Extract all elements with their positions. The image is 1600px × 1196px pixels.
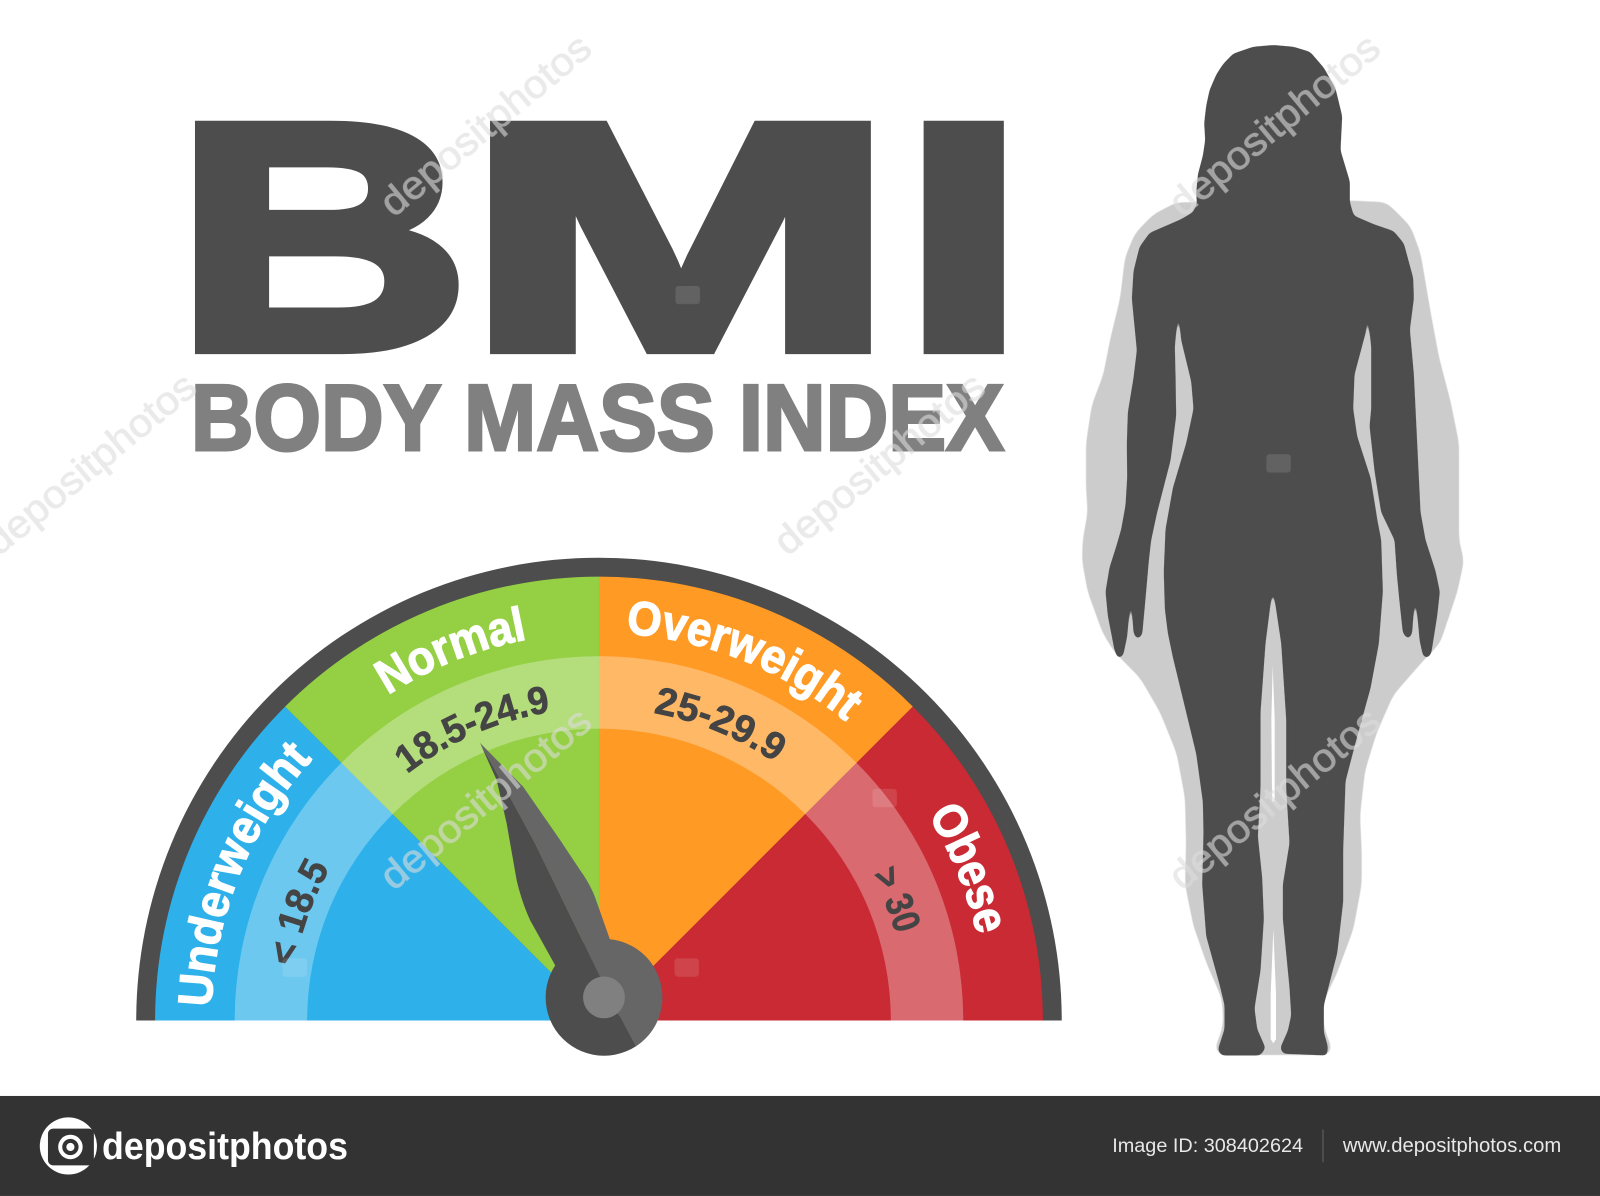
watermark text: depositphotos — [1161, 26, 1389, 225]
silhouette: woman before and after — [1082, 46, 1464, 1055]
gauge — [136, 558, 1062, 1056]
sector: obese — [599, 707, 1043, 1020]
value: above 30: > 30 — [874, 865, 920, 931]
silhouette: slim body — [1106, 46, 1439, 1055]
needle — [480, 743, 662, 1056]
watermark text: depositphotos — [1161, 700, 1389, 899]
title: BMI: B — [176, 57, 469, 416]
gap between legs upper — [1271, 666, 1275, 801]
title: BMI: I — [903, 57, 1025, 416]
title: BMI: M — [465, 58, 896, 417]
silhouette: larger body — [1082, 201, 1464, 1055]
footer divider — [1322, 1130, 1323, 1162]
value: below 18.5: < 18.5 — [275, 858, 327, 964]
watermark camera marks — [283, 286, 1291, 977]
label: overweight: Overweight — [628, 601, 862, 722]
title: BMI — [176, 57, 1025, 417]
watermark text: depositphotos — [766, 365, 994, 564]
label: obese: Obese — [933, 804, 1000, 932]
watermark text: depositphotos — [372, 26, 600, 225]
image id: Image ID: 308402624 — [1112, 1135, 1303, 1157]
needle light half — [480, 743, 662, 1046]
watermark text: depositphotos — [372, 700, 600, 899]
watermark text — [0, 26, 1389, 899]
gauge outer ring — [136, 558, 1062, 1020]
value: 18.5-24.9: 18.5-24.9 — [396, 686, 548, 773]
gap between legs lower — [1271, 929, 1276, 1043]
label: underweight: Underweight — [178, 742, 313, 1004]
footer bar — [0, 1096, 1600, 1196]
needle hub — [546, 939, 662, 1056]
footer logo icon — [40, 1117, 97, 1175]
sector: normal — [285, 577, 599, 1020]
subtitle: body mass index: BODY MASS INDEX — [191, 365, 1004, 470]
needle dark half — [480, 743, 604, 997]
label: normal: Normal — [372, 605, 525, 694]
light value band — [235, 656, 963, 1020]
footer logo text: depositphotos — [102, 1125, 348, 1167]
sector: overweight — [599, 577, 913, 1020]
website: www.depositphotos.com — [1342, 1135, 1561, 1157]
sector: underweight — [155, 707, 599, 1020]
value: 25-29.9: 25-29.9 — [654, 688, 786, 759]
needle pivot — [583, 976, 625, 1018]
